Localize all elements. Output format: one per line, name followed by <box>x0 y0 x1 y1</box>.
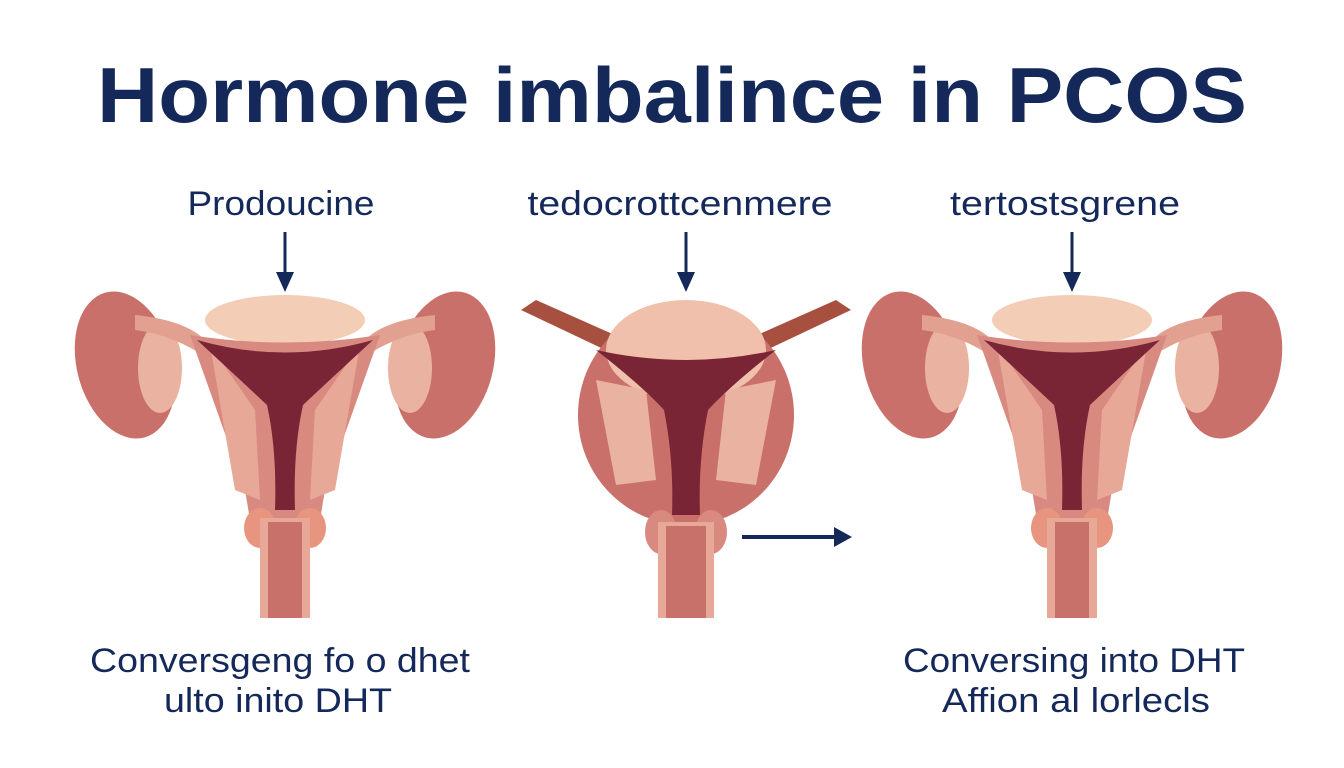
arrow: right <box>742 527 852 547</box>
arrow: middle down <box>677 232 695 292</box>
label: right: tertostsgrene <box>950 185 1180 223</box>
uterus: right <box>846 280 1298 618</box>
label: middle: tedocrottcenmere <box>528 185 832 223</box>
caption: right: Conversing into DHT <box>903 642 1245 680</box>
caption: left line 2: ulto inito DHT <box>164 682 392 720</box>
label: left: Prodoucine <box>188 185 374 223</box>
caption: left: Conversgeng fo o dhet <box>90 642 471 680</box>
uterus: middle <box>521 300 851 618</box>
uterus: left <box>59 280 511 618</box>
arrow: right down <box>1063 232 1081 292</box>
arrow: left down <box>276 232 294 292</box>
caption: right line 2: Affion al lorlecls <box>942 682 1210 720</box>
title: Hormone imbalince in PCOS <box>97 51 1247 139</box>
